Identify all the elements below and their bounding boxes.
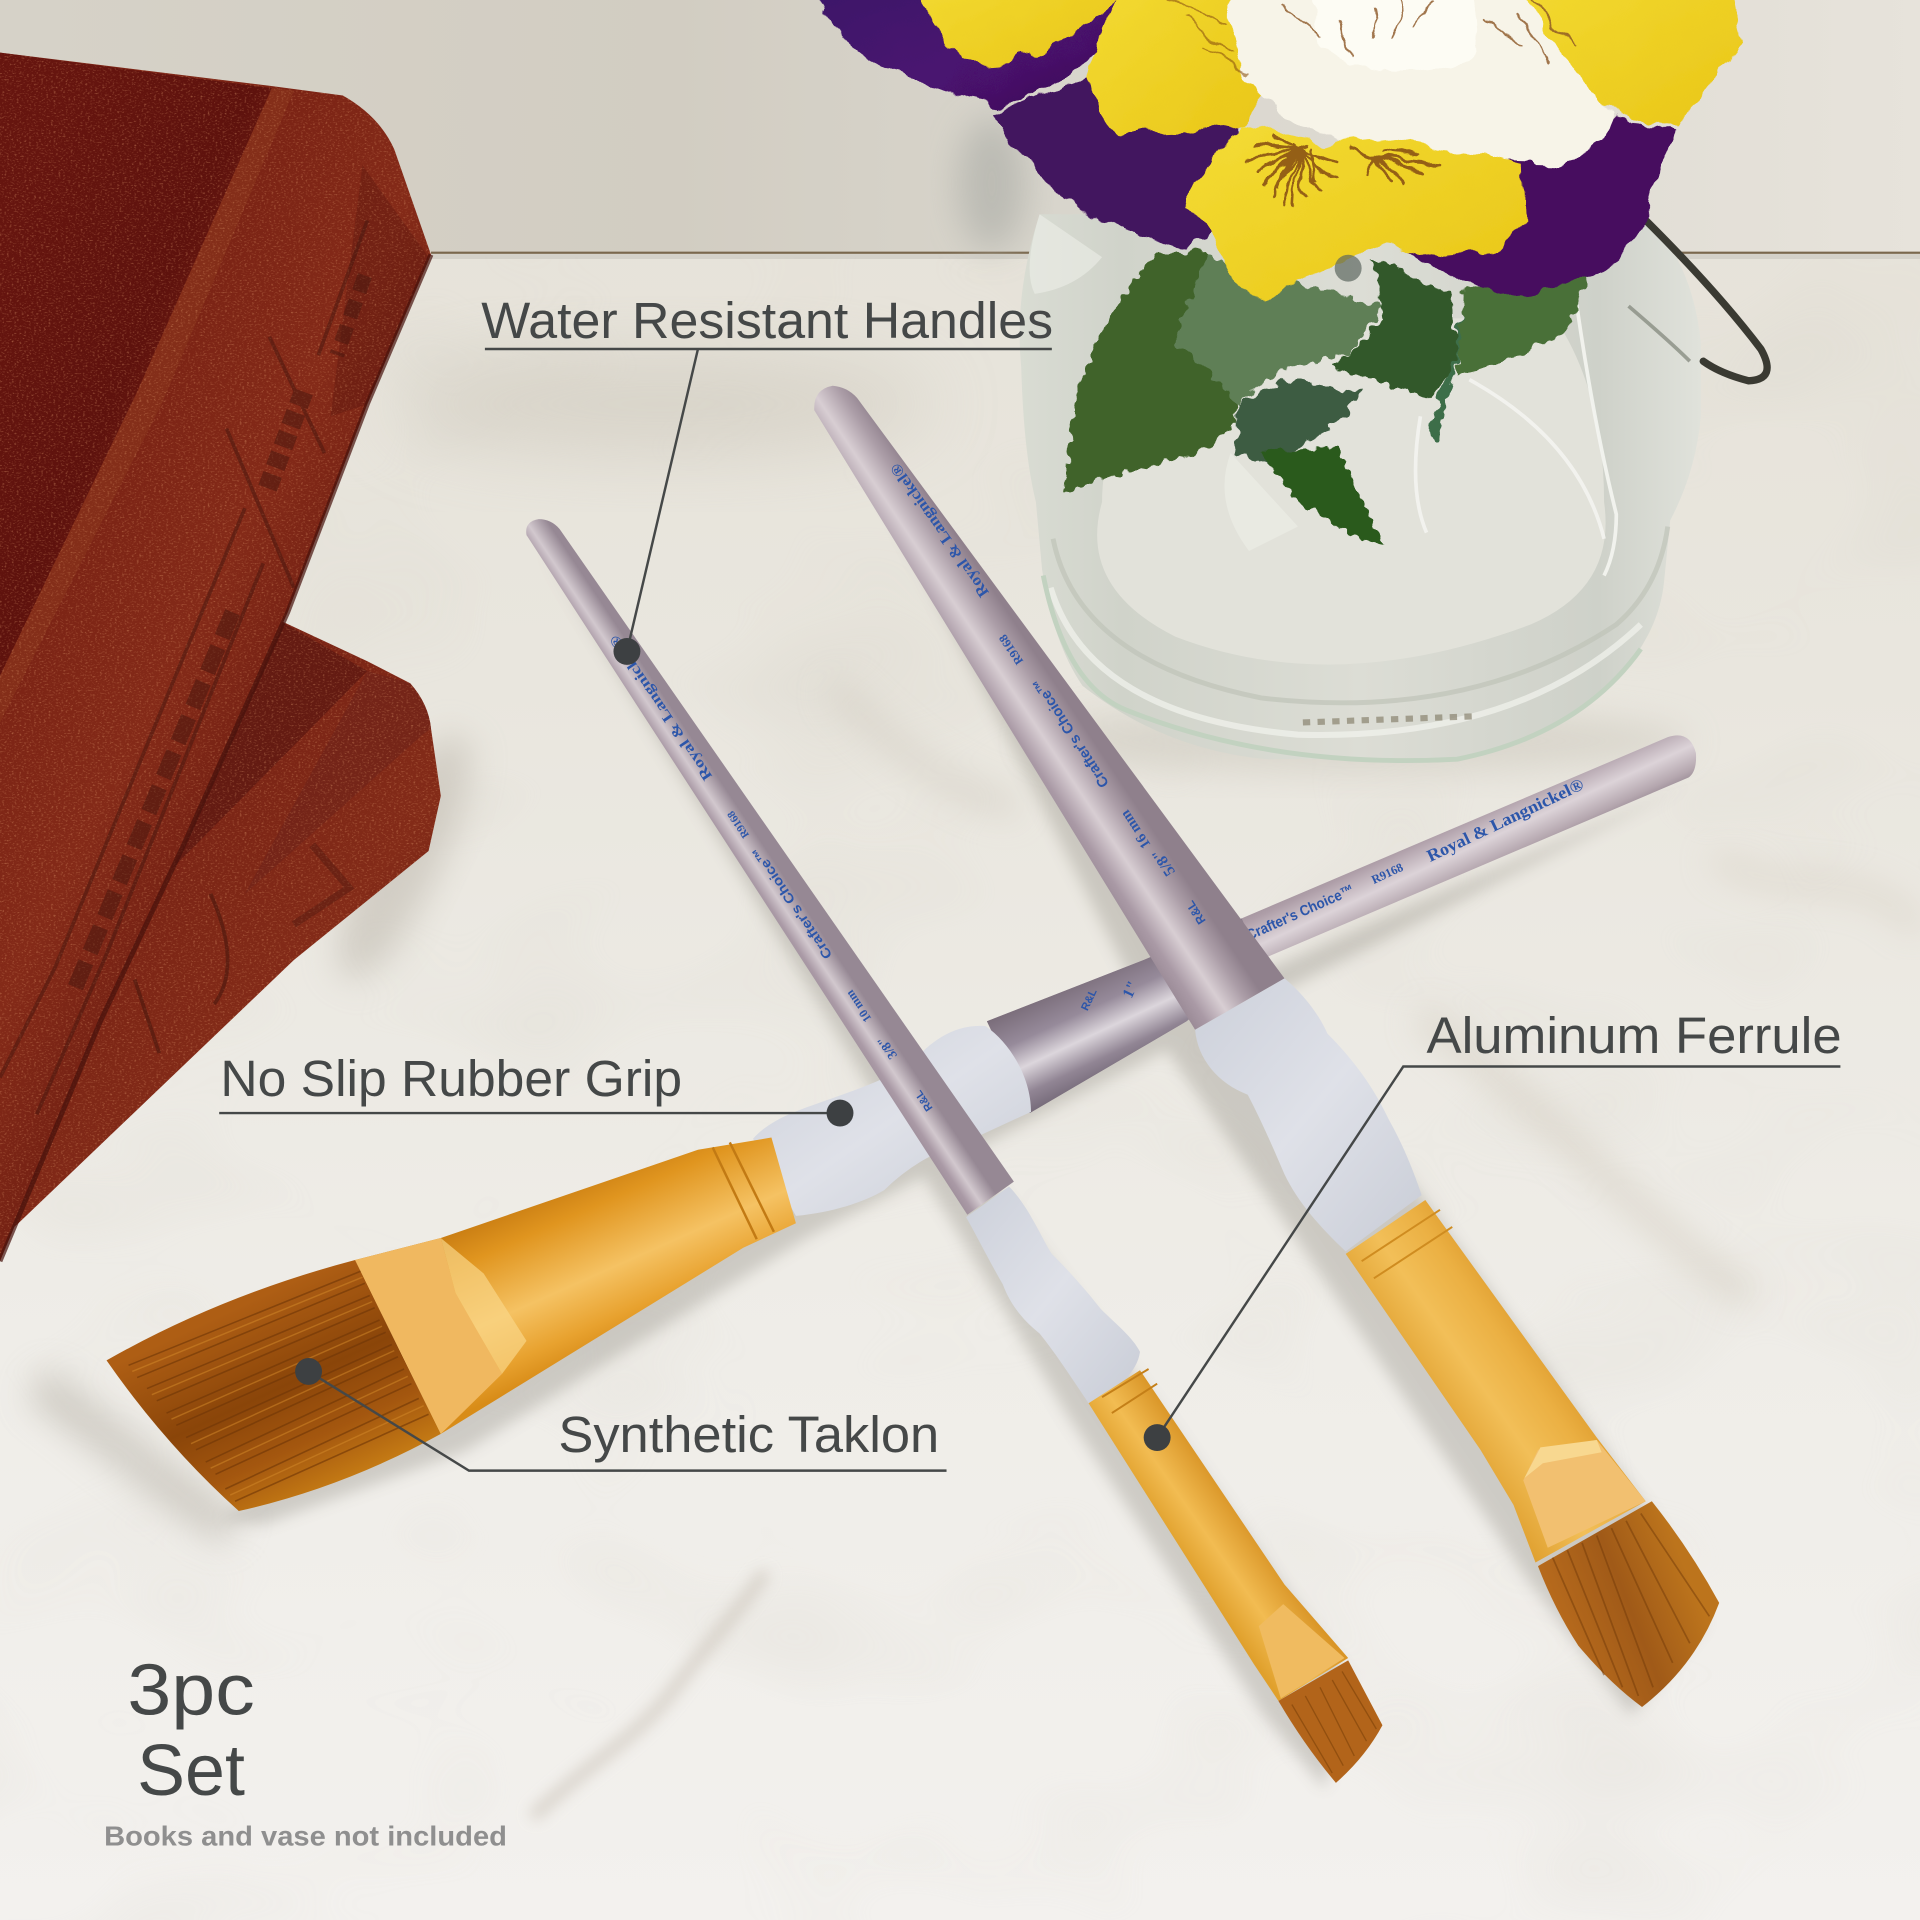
imprint text on handle B: Royal & Langnickel® (887, 460, 993, 600)
imprint text on handle C: Royal & Langnickel® (607, 632, 716, 783)
rubber grip C (966, 1187, 1140, 1403)
bristles A (107, 1260, 441, 1511)
brush A: large brush, lying horizontally (107, 735, 1696, 1511)
icon: vase wire handle (1640, 214, 1767, 381)
callout: Synthetic Taklon: Synthetic Taklon (558, 1405, 939, 1463)
set size heading: 3pc (127, 1650, 255, 1730)
petal: upper right yellow (1480, 0, 1740, 129)
imprint text on handle A: Crafter's Choice™ (1244, 882, 1357, 944)
imprint text on handle A: 1" (1120, 978, 1142, 1001)
imprint text on handle B (887, 460, 1209, 927)
large red book (0, 0, 441, 1273)
petal: bottom yellow (1187, 122, 1526, 300)
imprint text on handle B: Crafter's Choice™ (1030, 675, 1113, 790)
faint callout dot behind flower (1335, 255, 1362, 282)
imprint text on handle A: R&L (1079, 987, 1100, 1013)
imprint text on handle C: 3/8" (874, 1033, 900, 1062)
bristles C (1278, 1660, 1382, 1783)
brush B: medium brush (814, 386, 1719, 1707)
ferrule A (355, 1138, 796, 1434)
rubber grip B (1195, 978, 1422, 1251)
vase glass body (1020, 214, 1701, 759)
handle B (814, 386, 1284, 1030)
petal: upper left purple (818, 0, 1133, 104)
handle A (987, 735, 1696, 1113)
imprint text on handle B: R&L (1183, 898, 1209, 927)
callout: Aluminum Ferrule: Aluminum Ferrule (1427, 1006, 1842, 1064)
petal: lower left purple (997, 73, 1237, 249)
imprint text on handle A: Royal & Langnickel® (1424, 775, 1587, 866)
callout: Water Resistant Handles: Water Resistant Handles (481, 291, 1053, 349)
set size heading (127, 1650, 255, 1811)
imprint text on handle A: R9168 (1369, 860, 1405, 887)
ferrule B (1346, 1200, 1646, 1562)
lower red book (14, 622, 441, 1226)
imprint text on handle C: R&L (913, 1087, 936, 1113)
handle C (526, 519, 1014, 1215)
imprint text on handle C: Crafter's Choice™ (749, 844, 835, 962)
imprint text on handle B: 16 mm (1118, 807, 1154, 851)
bristles B (1538, 1501, 1719, 1707)
imprint text on handle C (607, 632, 936, 1113)
brush C: small brush (526, 519, 1382, 1783)
callout: Aluminum Ferrule (1144, 1006, 1842, 1451)
imprint text on handle C: 10 mm (843, 988, 874, 1025)
pansy flower (818, 0, 1740, 300)
rubber grip A (753, 1026, 1031, 1216)
petal veining (1169, 0, 1580, 206)
vase (1020, 214, 1767, 773)
set size heading: Set (137, 1731, 245, 1811)
shadows under brushes (220, 424, 1704, 1789)
ferrule C (1089, 1370, 1348, 1701)
petal: middle yellow (1087, 0, 1267, 135)
petal: lower right purple (1401, 110, 1674, 294)
petal: white centre (1229, 0, 1611, 163)
imprint text on handle B: R9168 (996, 632, 1026, 667)
disclaimer note: Books and vase not included (104, 1820, 507, 1851)
callout: No Slip Rubber Grip: No Slip Rubber Grip (220, 1049, 682, 1107)
callout: Water Resistant Handles (481, 291, 1053, 665)
callout: No Slip Rubber Grip (219, 1049, 853, 1127)
leaves and stem (1064, 251, 1592, 545)
imprint text on handle C: R9168 (725, 808, 752, 840)
petal: upper left yellow (921, 0, 1117, 64)
imprint text on handle A (1079, 775, 1587, 1013)
imprint text on handle B: 5/8" (1149, 845, 1179, 879)
callout: Synthetic Taklon (295, 1358, 947, 1471)
